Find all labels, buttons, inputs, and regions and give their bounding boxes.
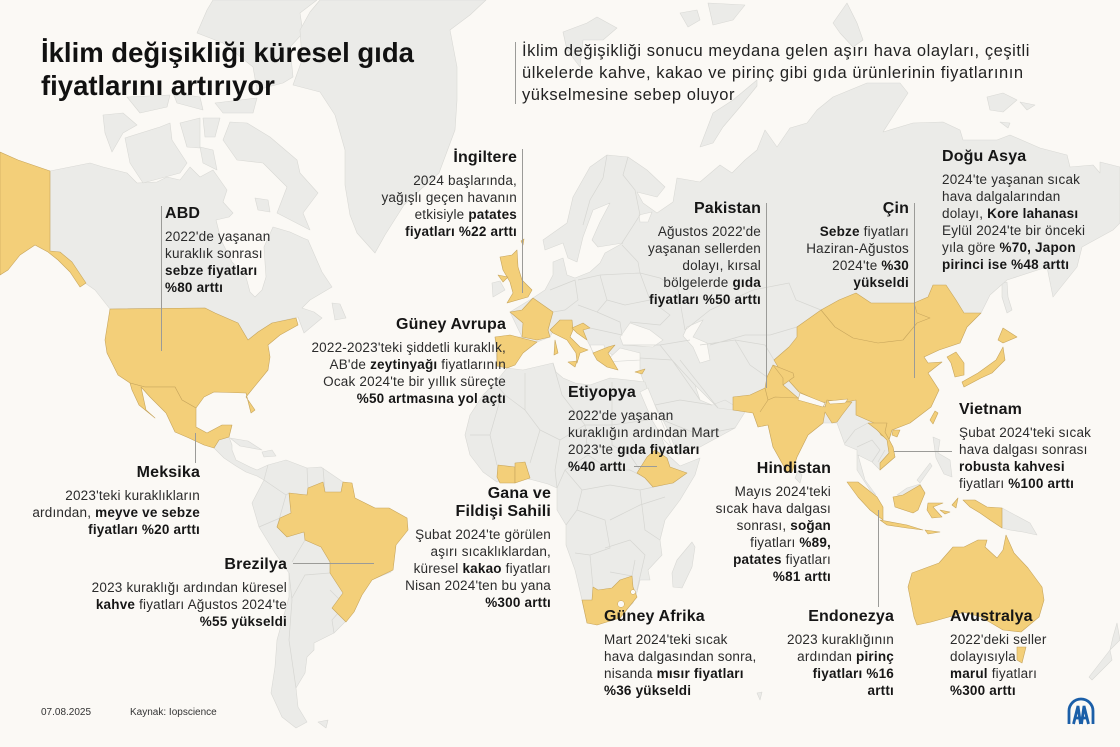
panel: Güney Avrupa: Güney Avrupa: [396, 316, 506, 332]
panel: Doğu Asya: 2024'te yaşanan sıcak: [942, 172, 1080, 187]
panel: Vietnam: Vietnam: [959, 400, 1022, 418]
leader line: Brezilya: [293, 563, 374, 564]
panel: Pakistan: bölgelerde gıda: [663, 275, 761, 290]
panel: Çin: Haziran-Ağustos: [806, 241, 909, 256]
panel: Hindistan: fiyatları %89,: [750, 535, 831, 550]
panel: Brezilya: [92, 556, 287, 629]
France: [510, 298, 553, 340]
footer date: 07.08.2025: [41, 707, 91, 718]
Greece: [593, 345, 618, 370]
panel: Doğu Asya: [942, 148, 1085, 272]
panel: Endonezya: ardından pirinç: [797, 649, 894, 664]
panel: İngiltere: fiyatları %22 arttı: [405, 224, 517, 239]
panel: İngiltere: etkisiyle patates: [415, 207, 517, 222]
panel: Pakistan: [648, 200, 761, 307]
panel: Gana ve Fildişi Sahili: Fildişi Sahili: [456, 502, 551, 520]
panel: Çin: yükseldi: [853, 275, 909, 290]
panel: Endonezya: [787, 608, 894, 698]
panel: Meksika: Meksika: [137, 464, 200, 480]
China and Mongolia: [774, 285, 981, 440]
panel: Meksika: 2023'teki kuraklıkların: [65, 488, 200, 503]
panel: Etiyopya: [568, 384, 719, 474]
icon: AA logo: [1068, 698, 1094, 724]
title: [41, 37, 414, 101]
panel: İngiltere: [381, 148, 517, 239]
panel: Etiyopya: 2022'de yaşanan: [568, 408, 673, 423]
panel: Vietnam: [959, 400, 1091, 491]
panel: Doğu Asya: hava dalgalarından: [942, 189, 1060, 204]
panel: Meksika: fiyatları %20 arttı: [88, 522, 200, 537]
panel: Güney Afrika: hava dalgasından sonra,: [604, 649, 756, 664]
panel: Etiyopya: kuraklığın ardından Mart: [568, 425, 719, 440]
panel: İngiltere: 2024 başlarında,: [413, 173, 517, 188]
panel: Pakistan: yaşanan sellerden: [648, 241, 761, 256]
panel: Gana ve Fildişi Sahili: Nisan 2024'ten bu yana: [405, 578, 551, 593]
panel: Hindistan: Mayıs 2024'teki: [735, 484, 831, 499]
panel: Endonezya: fiyatları %16: [813, 666, 894, 681]
panel: Gana ve Fildişi Sahili: küresel kakao fiyatları: [414, 561, 551, 576]
Mexico: [130, 383, 232, 448]
panel: Avustralya: [950, 608, 1047, 698]
Italy: [550, 320, 588, 363]
panel: Gana ve Fildişi Sahili: aşırı sıcaklıklardan,: [430, 544, 551, 559]
Croatia: [572, 323, 590, 340]
Alaska: [0, 152, 86, 287]
panel: Avustralya: %300 arttı: [950, 683, 1016, 698]
panel: Hindistan: Hindistan: [757, 460, 831, 476]
panel: Güney Avrupa: 2022-2023'teki şiddetli kuraklık,: [311, 340, 506, 355]
country borders: [550, 155, 821, 435]
panel: ABD: %80 arttı: [165, 280, 223, 295]
enclaves: [618, 393, 848, 607]
panel: Doğu Asya: pirinci ise %48 arttı: [942, 257, 1069, 272]
panel: Avustralya: 2022'deki seller: [950, 632, 1047, 647]
Spain: [495, 335, 537, 368]
panel: Endonezya: 2023 kuraklığının: [787, 632, 894, 647]
leader line: Etiyopya: [634, 466, 657, 467]
panel: ABD: kuraklık sonrası: [165, 246, 263, 261]
panel: Hindistan: %81 arttı: [773, 569, 831, 584]
panel: Hindistan: [716, 460, 831, 584]
Ethiopia: [637, 450, 687, 487]
panel: Çin: 2024'te %30: [832, 258, 909, 273]
panel: İngiltere: İngiltere: [453, 148, 517, 166]
panel: İngiltere: yağışlı geçen havanın: [381, 190, 517, 205]
panel: ABD: ABD: [165, 204, 200, 222]
subtitle: ülkelerde kahve, kakao ve pirinç gibi gıda ürünlerinin fiyatlarının: [522, 64, 1024, 82]
panel: Güney Afrika: Güney Afrika: [604, 608, 705, 624]
leader line: Vietnam: [894, 451, 952, 452]
panel: Vietnam: hava dalgası sonrası: [959, 442, 1088, 457]
panel: Brezilya: Brezilya: [224, 556, 287, 572]
panel: Endonezya: Endonezya: [808, 608, 894, 624]
panel: Gana ve Fildişi Sahili: %300 arttı: [485, 595, 551, 610]
panel: Pakistan: dolayı, kırsal: [682, 258, 761, 273]
panel: Brezilya: %55 yükseldi: [200, 614, 287, 629]
Hainan and Taiwan: [892, 430, 900, 437]
leader line: Meksika: [195, 433, 196, 463]
panel: Vietnam: fiyatları %100 arttı: [959, 476, 1074, 491]
United States: [105, 308, 298, 413]
panel: Güney Avrupa: [311, 316, 506, 406]
panel: Güney Avrupa: Ocak 2024'te bir yıllık süreçte: [323, 374, 506, 389]
panel: Avustralya: Avustralya: [950, 608, 1033, 624]
panel: Vietnam: robusta kahvesi: [959, 459, 1065, 474]
leader line: Endonezya: [878, 510, 879, 607]
title: İklim değişikliği küresel gıda: [41, 37, 414, 68]
panel: Gana ve Fildişi Sahili: Şubat 2024'te görülen: [415, 527, 551, 542]
panel: Meksika: ardından, meyve ve sebze: [32, 505, 200, 520]
panel: Doğu Asya: Eylül 2024'te bir önceki: [942, 223, 1085, 238]
inland seas: [605, 212, 710, 448]
panel: Hindistan: sıcak hava dalgası: [716, 501, 831, 516]
panel: Vietnam: Şubat 2024'teki sıcak: [959, 425, 1091, 440]
panel: Güney Afrika: [604, 608, 756, 698]
panel: Pakistan: fiyatları %50 arttı: [649, 292, 761, 307]
panel: Avustralya: marul fiyatları: [950, 666, 1037, 681]
leader line: İngiltere: [522, 149, 523, 293]
panel: ABD: [165, 204, 270, 295]
Korea: [947, 352, 964, 377]
leader line: Çin: [914, 203, 915, 378]
panel: Avustralya: dolayısıyla: [950, 649, 1016, 664]
India and Pakistan: [733, 365, 852, 472]
panel: Doğu Asya: Doğu Asya: [942, 148, 1026, 164]
panel: Çin: Sebze fiyatları: [820, 224, 909, 239]
Ivory Coast and Ghana: [497, 465, 515, 483]
Australia: [908, 535, 1044, 632]
panel: Etiyopya: 2023'te gıda fiyatları: [568, 442, 700, 457]
panel: Hindistan: patates fiyatları: [733, 552, 831, 567]
panel: Çin: Çin: [883, 200, 909, 216]
title: fiyatlarını artırıyor: [41, 70, 275, 101]
panel: Güney Afrika: %36 yükseldi: [604, 683, 691, 698]
panel: ABD: sebze fiyatları: [165, 263, 257, 278]
leader line: Pakistan: [766, 203, 767, 388]
panel: ABD: 2022'de yaşanan: [165, 229, 270, 244]
panel: Endonezya: arttı: [867, 683, 894, 698]
panel: Etiyopya: Etiyopya: [568, 384, 636, 400]
United Kingdom: [500, 250, 532, 303]
Indonesia: [847, 482, 883, 520]
panel: Çin: [806, 200, 909, 290]
panel: Pakistan: Ağustos 2022'de: [658, 224, 761, 239]
Brazil: [277, 482, 408, 622]
panel: Güney Avrupa: AB'de zeytinyağı fiyatlarının: [330, 357, 506, 372]
leader line: ABD: [161, 206, 162, 351]
panel: Brezilya: kahve fiyatları Ağustos 2024'te: [96, 597, 287, 612]
panel: Hindistan: sonrası, soğan: [737, 518, 831, 533]
subtitle rule: [515, 42, 516, 104]
panel: Meksika: [32, 464, 200, 537]
subtitle: [522, 42, 1030, 104]
panel: Gana ve Fildişi Sahili: [405, 484, 551, 610]
panel: Doğu Asya: yıla göre %70, Japon: [942, 240, 1076, 255]
panel: Brezilya: 2023 kuraklığı ardından küresel: [92, 580, 287, 595]
Vietnam: [868, 423, 895, 470]
panel: Doğu Asya: dolayı, Kore lahanası: [942, 206, 1078, 221]
highlighted countries: [0, 152, 1044, 663]
subtitle: İklim değişikliği sonucu meydana gelen aşırı hava olayları, çeşitli: [522, 42, 1030, 60]
panel: Güney Afrika: nisanda mısır fiyatları: [604, 666, 744, 681]
panel: Etiyopya: %40 arttı: [568, 459, 626, 474]
Japan: [998, 328, 1017, 343]
panel: Gana ve Fildişi Sahili: Gana ve: [488, 484, 551, 502]
subtitle: yükselmesine sebep oluyor: [522, 86, 735, 104]
South Africa: [582, 576, 637, 625]
panel: Güney Avrupa: %50 artmasına yol açtı: [357, 391, 506, 406]
panel: Pakistan: Pakistan: [694, 200, 761, 216]
panel: Güney Afrika: Mart 2024'teki sıcak: [604, 632, 728, 647]
footer source: Kaynak: Iopscience: [130, 707, 217, 718]
